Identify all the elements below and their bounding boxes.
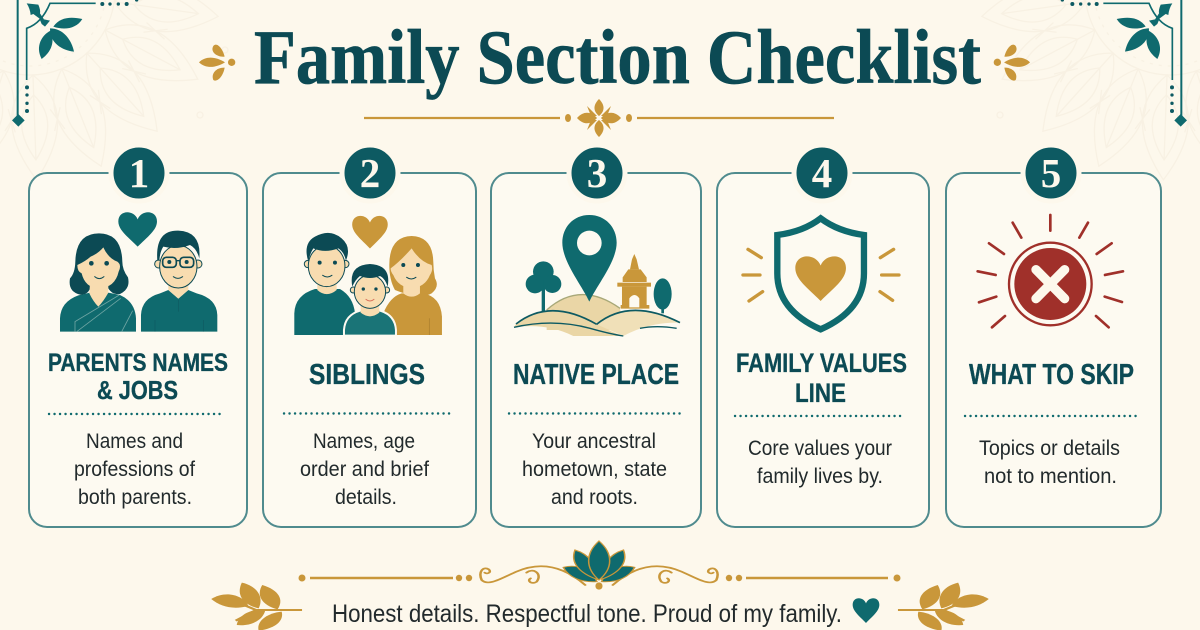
corner ornament: top left bbox=[12, 0, 138, 127]
description: order and brief bbox=[300, 458, 429, 481]
title ornament: left bbox=[199, 45, 235, 81]
panel: siblings bbox=[263, 145, 476, 527]
corner ornament: top right bbox=[1061, 0, 1187, 127]
description: hometown, state bbox=[522, 458, 667, 481]
description: professions of bbox=[74, 458, 195, 481]
description: Topics or details bbox=[979, 437, 1120, 460]
description: Core values your bbox=[748, 437, 892, 460]
number badge 4: 4 bbox=[812, 150, 832, 196]
title: Family Section Checklist bbox=[254, 14, 981, 100]
heading: NATIVE PLACE bbox=[513, 359, 679, 391]
number badge 2 bbox=[342, 145, 398, 201]
description: Your ancestral bbox=[532, 430, 656, 453]
description: and roots. bbox=[551, 486, 638, 509]
number badge 3 bbox=[569, 145, 625, 201]
description: details. bbox=[335, 486, 397, 509]
number badge 2: 2 bbox=[360, 150, 380, 196]
description: family lives by. bbox=[757, 465, 883, 488]
heading bbox=[736, 348, 907, 408]
heading: PARENTS NAMES bbox=[48, 349, 228, 377]
description: Names and bbox=[86, 430, 183, 453]
description bbox=[74, 430, 195, 509]
title divider with flower bbox=[364, 99, 834, 137]
description bbox=[522, 430, 667, 509]
heading: FAMILY VALUES bbox=[736, 348, 907, 378]
description: not to mention. bbox=[984, 465, 1117, 488]
icon: location pin with landscape bbox=[514, 215, 680, 336]
icon: footer heart bbox=[853, 598, 879, 623]
number badge 3: 3 bbox=[587, 150, 607, 196]
panel: native place bbox=[491, 145, 701, 527]
heading: LINE bbox=[795, 378, 846, 408]
icon: couple with heart bbox=[60, 212, 217, 332]
description: Names, age bbox=[313, 430, 415, 453]
heading bbox=[48, 349, 228, 405]
footer laurel: left bbox=[211, 583, 302, 630]
description: both parents. bbox=[78, 486, 192, 509]
description bbox=[300, 430, 429, 509]
number badge 1: 1 bbox=[129, 150, 149, 196]
footer laurel: right bbox=[898, 583, 989, 630]
number badge 5: 5 bbox=[1041, 150, 1061, 196]
icon: shield with heart bbox=[743, 218, 899, 329]
description bbox=[748, 437, 892, 488]
number badge 5 bbox=[1023, 145, 1079, 201]
heading: WHAT TO SKIP bbox=[969, 359, 1134, 391]
panel: family values line bbox=[717, 145, 929, 527]
heading: SIBLINGS bbox=[309, 359, 425, 391]
panel: what to skip bbox=[946, 145, 1161, 527]
description bbox=[979, 437, 1120, 488]
footer ornament: lotus and scrolls bbox=[298, 541, 900, 590]
icon: siblings with heart bbox=[294, 216, 442, 336]
title ornament: right bbox=[994, 45, 1030, 81]
number badge 1 bbox=[111, 145, 167, 201]
panel: parents names and jobs bbox=[29, 145, 247, 527]
footer tagline: Honest details. Respectful tone. Proud of my family. bbox=[332, 600, 842, 628]
icon: red cross with rays bbox=[978, 215, 1123, 327]
number badge 4 bbox=[794, 145, 850, 201]
heading: & JOBS bbox=[97, 375, 178, 405]
